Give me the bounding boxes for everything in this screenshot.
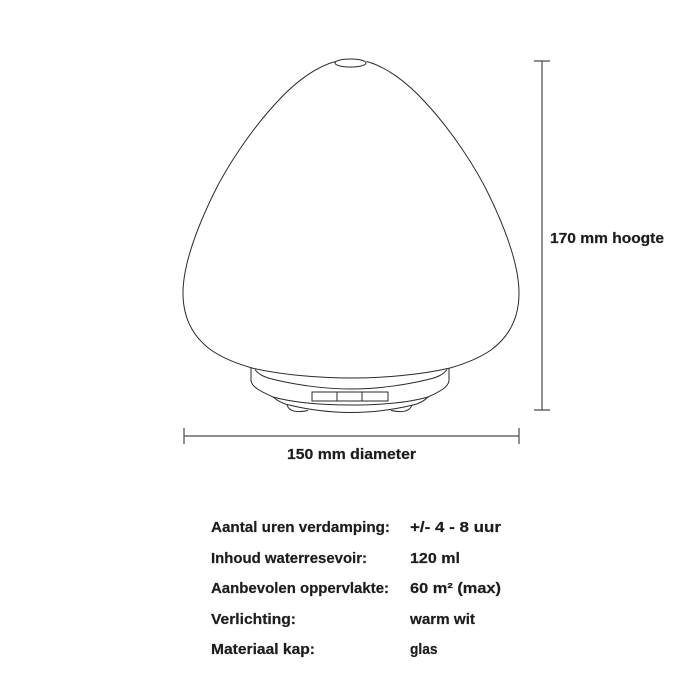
spec: lighting: warm wit bbox=[409, 612, 475, 628]
diffuser drawing bbox=[183, 59, 519, 412]
spec: shade material: Materiaal kap: bbox=[211, 642, 315, 658]
height label: 170 mm hoogte bbox=[550, 231, 664, 247]
top opening bbox=[335, 59, 366, 67]
spec: reservoir capacity: Inhoud waterresevoir: bbox=[211, 551, 367, 567]
spec: reservoir capacity bbox=[211, 551, 460, 567]
base bbox=[251, 368, 449, 412]
spec: shade material: glas bbox=[410, 642, 438, 658]
control panel bbox=[312, 392, 388, 401]
spec: shade material bbox=[211, 642, 438, 658]
spec: lighting: Verlichting: bbox=[211, 612, 296, 628]
spec: reservoir capacity: 120 ml bbox=[410, 551, 460, 567]
diameter label: 150 mm diameter bbox=[287, 447, 416, 463]
spec: recommended area: 60 m² (max) bbox=[410, 581, 501, 597]
spec: recommended area bbox=[211, 581, 501, 597]
spec: evaporation hours bbox=[211, 520, 501, 536]
width dimension line bbox=[184, 428, 519, 444]
spec: evaporation hours: +/- 4 - 8 uur bbox=[410, 520, 501, 536]
spec: lighting bbox=[211, 612, 475, 628]
spec: evaporation hours: Aantal uren verdamping: bbox=[211, 520, 390, 536]
glass dome bbox=[183, 62, 519, 378]
height dimension line bbox=[534, 61, 550, 410]
specifications table bbox=[211, 520, 501, 658]
spec: recommended area: Aanbevolen oppervlakte: bbox=[211, 581, 389, 597]
